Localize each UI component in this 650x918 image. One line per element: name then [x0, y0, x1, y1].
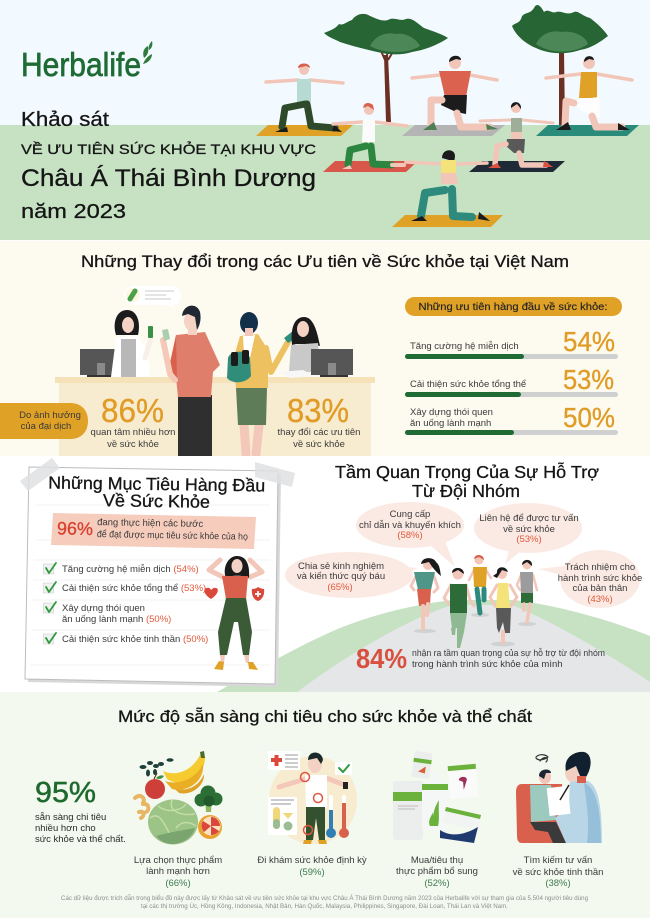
icon: man in salmon shirt — [162, 306, 220, 456]
panel: white band — [0, 456, 650, 692]
stat: 83%: về sức khỏe — [293, 439, 345, 450]
icon: seeds — [140, 758, 174, 776]
stat: 86%: 86% — [101, 392, 164, 429]
title: Khảo sát — [21, 109, 109, 131]
icon: medical card — [268, 751, 300, 770]
heading pill: top priorities: Những ưu tiên hàng đầu về sức khỏe: — [418, 301, 608, 313]
speech bubble: share knowledge 65%: và kiến thức quý báu — [297, 571, 385, 582]
icon: pharmacist — [111, 310, 153, 377]
heading pill: top priorities — [405, 297, 622, 316]
runner: yellow top — [490, 567, 517, 646]
caption: health checks 59%: Đi khám sức khỏe định kỳ — [257, 855, 367, 866]
caption: supplements 52%: thực phẩm bổ sung — [396, 866, 478, 877]
speech bubble: accountability 43%: Trách nhiệm cho — [565, 562, 635, 573]
bar row: immune system 54%: Tăng cường hệ miễn dịch — [410, 341, 519, 352]
icon: middle bottle — [422, 772, 448, 830]
caption: mental health 38%: Tìm kiếm tư vấn — [524, 855, 592, 866]
goal item: immune: Tăng cường hệ miễn dịch (54%) — [62, 564, 199, 575]
icon: tree left — [324, 14, 448, 122]
bar row: overall health 53%: 53% — [563, 364, 614, 395]
icon: cabbage — [148, 800, 198, 844]
runner: gold shirt — [469, 555, 491, 617]
speech bubble: consult 53% — [474, 503, 582, 564]
stat: 84% — [356, 643, 605, 674]
title — [21, 109, 316, 223]
icon: banana — [163, 751, 205, 794]
bar row: healthy eating 50% — [405, 402, 618, 435]
icon: man with targets — [279, 752, 348, 844]
bar chart: priorities — [405, 326, 618, 435]
callout: due to pandemic: của đại dịch — [21, 421, 71, 432]
stat: 95%: 95% — [35, 777, 96, 809]
runner: teal shirt red shorts — [411, 558, 441, 633]
icon: sachet — [440, 807, 481, 843]
icon: standing woman — [209, 556, 262, 670]
title: VỀ ƯU TIÊN SỨC KHỎE TẠI KHU VỰC — [21, 140, 316, 157]
stat: 84%: nhận ra tầm quan trọng của sự hỗ trợ từ đội nhóm — [412, 648, 605, 659]
stat: 84%: trong hành trình sức khỏe của mình — [412, 659, 563, 670]
caption: mental health 38% — [513, 855, 603, 889]
icon: broccoli — [194, 786, 222, 812]
icon group: counselling — [516, 752, 602, 843]
footnote: tại các thị trường Úc, Hồng Kông, Indonesia, Nhật Bản, Hàn Quốc, Malaysia, Philippines, Singapore, Đài Loan, Thái Lan và Việt Nam. — [141, 903, 508, 910]
logo: Herbalife: Herbalife — [21, 46, 141, 83]
speech bubble: accountability 43%: hành trình sức khỏe — [558, 573, 642, 584]
bar row: overall health 53% — [405, 364, 618, 397]
panel: team support ground — [217, 600, 650, 692]
icon: left monitor — [80, 349, 122, 377]
bar row: healthy eating 50%: Xây dựng thói quen — [410, 407, 493, 418]
icon: cashews — [135, 796, 148, 818]
callout: 96%: đang thực hiện các bước — [97, 517, 204, 530]
footnote: Các dữ liệu được trích dẫn trong biểu đồ này được lấy từ Khảo sát về ưu tiên sức khỏe tại khu vực Châu Á Thái Bình Dương năm 2023 của Herbalife với sự tham gia của 5.504 người tiêu dùng — [61, 895, 588, 902]
icon: grapefruit — [198, 815, 222, 839]
stat: 95% — [35, 777, 126, 845]
icon: check bubble — [335, 762, 352, 775]
icon group: supplements — [393, 751, 481, 843]
illustration: pharmacy counter — [55, 286, 375, 456]
heading: Những Thay đổi trong các Ưu tiên về Sức khỏe tại Việt Nam — [81, 252, 569, 271]
stat: 95%: sức khỏe và thể chất. — [35, 834, 126, 845]
title: năm 2023 — [21, 201, 126, 223]
icon: yoga person 5 on dark mat — [469, 102, 565, 172]
icon: tea box — [448, 764, 478, 799]
stat: 95%: nhiều hơn cho — [35, 823, 96, 834]
bar row: immune system 54%: 54% — [563, 326, 615, 357]
speech bubble: guidance 58%: Cung cấp — [390, 509, 430, 520]
goal item: eating: Xây dựng thói quen — [62, 603, 145, 614]
speech bubble: accountability 43%: của bản thân — [573, 583, 627, 594]
panel: top health goals note — [20, 458, 295, 687]
icon: medical report — [268, 797, 297, 835]
icon: shield — [252, 587, 264, 601]
speech bubble: accountability 43% — [538, 550, 642, 608]
icon: seated woman cashier — [278, 317, 320, 378]
stat: 95%: sẵn sàng chi tiêu — [35, 812, 106, 823]
title: Châu Á Thái Bình Dương — [21, 165, 316, 192]
heading: team support: Từ Đội Nhóm — [412, 481, 520, 501]
icon: tree right — [512, 5, 608, 125]
runner: grey shirt — [517, 560, 537, 626]
icon: yoga person 2 on grey mat — [402, 56, 505, 136]
goal item: eating — [44, 602, 171, 625]
heading — [48, 472, 265, 513]
icon: blue thermometer — [326, 795, 336, 838]
caption: healthy food 66% — [134, 855, 222, 889]
icon: small bottle — [411, 751, 433, 779]
caption: supplements 52%: Mua/tiêu thụ — [411, 855, 463, 866]
stat: 83%: 83% — [287, 392, 349, 429]
caption: healthy food 66%: (66%) — [165, 878, 191, 889]
bar row: overall health 53%: Cải thiện sức khỏe tổng thể — [410, 379, 526, 390]
bar row: healthy eating 50%: 50% — [563, 402, 615, 433]
speech bubble: share knowledge 65%: Chia sẻ kinh nghiệm — [298, 561, 384, 572]
speech bubble: guidance 58%: (58%) — [397, 530, 423, 541]
caption: healthy food 66%: lành mạnh hơn — [146, 866, 210, 877]
speech bubble: guidance 58%: chỉ dẫn và khuyến khích — [359, 520, 461, 531]
panel: willingness to spend — [0, 692, 650, 918]
stat: 86%: về sức khỏe — [107, 439, 159, 450]
bar row: healthy eating 50%: ăn uống lành mạnh — [410, 418, 491, 429]
callout: due to pandemic: Do ảnh hưởng — [19, 410, 81, 421]
speech bubble: guidance 58% — [356, 502, 464, 567]
icon: patient — [530, 770, 566, 843]
stat: 83% — [278, 392, 360, 450]
panel: header — [0, 0, 650, 240]
icon group: health check — [268, 751, 357, 844]
caption: healthy food 66%: Lựa chọn thực phẩm — [134, 855, 222, 866]
icon group: healthy foods — [135, 751, 222, 844]
icon: yoga person 1 on yellow mat — [256, 64, 353, 136]
callout: 96%: để đạt được mục tiêu sức khỏe của họ — [97, 529, 248, 543]
heading: team support: Tầm Quan Trọng Của Sự Hỗ Trợ — [335, 461, 599, 482]
caption: health checks 59%: (59%) — [299, 867, 325, 878]
footnote — [61, 895, 588, 910]
heading: Mức độ sẵn sàng chi tiêu cho sức khỏe và thể chất — [118, 707, 532, 726]
heading: Những Mục Tiêu Hàng Đầu — [48, 472, 265, 496]
caption: mental health 38%: (38%) — [545, 878, 571, 889]
icon: yoga person 6 on yellow mat — [392, 150, 503, 227]
runner: dark green shirt — [444, 568, 474, 648]
icon: yoga person 4 on red mat — [323, 103, 418, 172]
stat: 83%: thay đổi các ưu tiên — [278, 427, 360, 438]
icon: man with backpack — [227, 312, 296, 454]
callout: 96% — [51, 513, 256, 549]
icon: counsellor — [547, 752, 602, 843]
illustration: runners — [411, 555, 537, 648]
stat: 84%: 84% — [356, 643, 407, 674]
bar row: immune system 54% — [405, 326, 618, 359]
caption: supplements 52%: (52%) — [424, 878, 450, 889]
heading: Về Sức Khỏe — [103, 490, 210, 512]
icon: worry scribble — [536, 755, 548, 762]
heading: team support — [335, 461, 599, 501]
stat: 86%: quan tâm nhiều hơn — [91, 427, 175, 438]
list: goals with checkmarks — [44, 563, 208, 645]
icon: armchair — [516, 784, 566, 843]
icon: large bottle — [393, 781, 423, 840]
stat: 86% — [91, 392, 175, 450]
icon: right monitor — [311, 349, 353, 377]
speech bubble: accountability 43%: (43%) — [587, 594, 613, 605]
speech bubble: consult 53%: (53%) — [516, 534, 542, 545]
icon: red thermometer — [339, 795, 349, 838]
icon: heart — [204, 588, 218, 599]
icon: yoga person 3 on teal mat — [536, 56, 639, 136]
speech bubble: consult 53%: Liên hệ để được tư vấn — [479, 513, 579, 524]
caption: health checks 59% — [257, 855, 367, 878]
callout: due to pandemic — [0, 403, 88, 439]
caption: supplements 52% — [396, 855, 478, 889]
speech bubble: consult 53%: về sức khỏe — [503, 524, 555, 535]
icon: speech bubble with capsule — [124, 286, 181, 309]
callout: 96%: 96% — [57, 518, 93, 539]
speech bubble: share knowledge 65%: (65%) — [327, 582, 353, 593]
icon: apple — [145, 773, 165, 799]
speech bubble: share knowledge 65% — [285, 552, 418, 598]
goal item: eating: ăn uống lành mạnh (50%) — [62, 614, 171, 625]
goal item: mental: Cải thiện sức khỏe tinh thần (50%) — [62, 634, 208, 645]
goal item: overall: Cải thiện sức khỏe tổng thể (53%) — [62, 583, 206, 594]
panel: changes in Vietnam — [0, 241, 650, 456]
caption: mental health 38%: về sức khỏe tinh thần — [513, 867, 603, 878]
